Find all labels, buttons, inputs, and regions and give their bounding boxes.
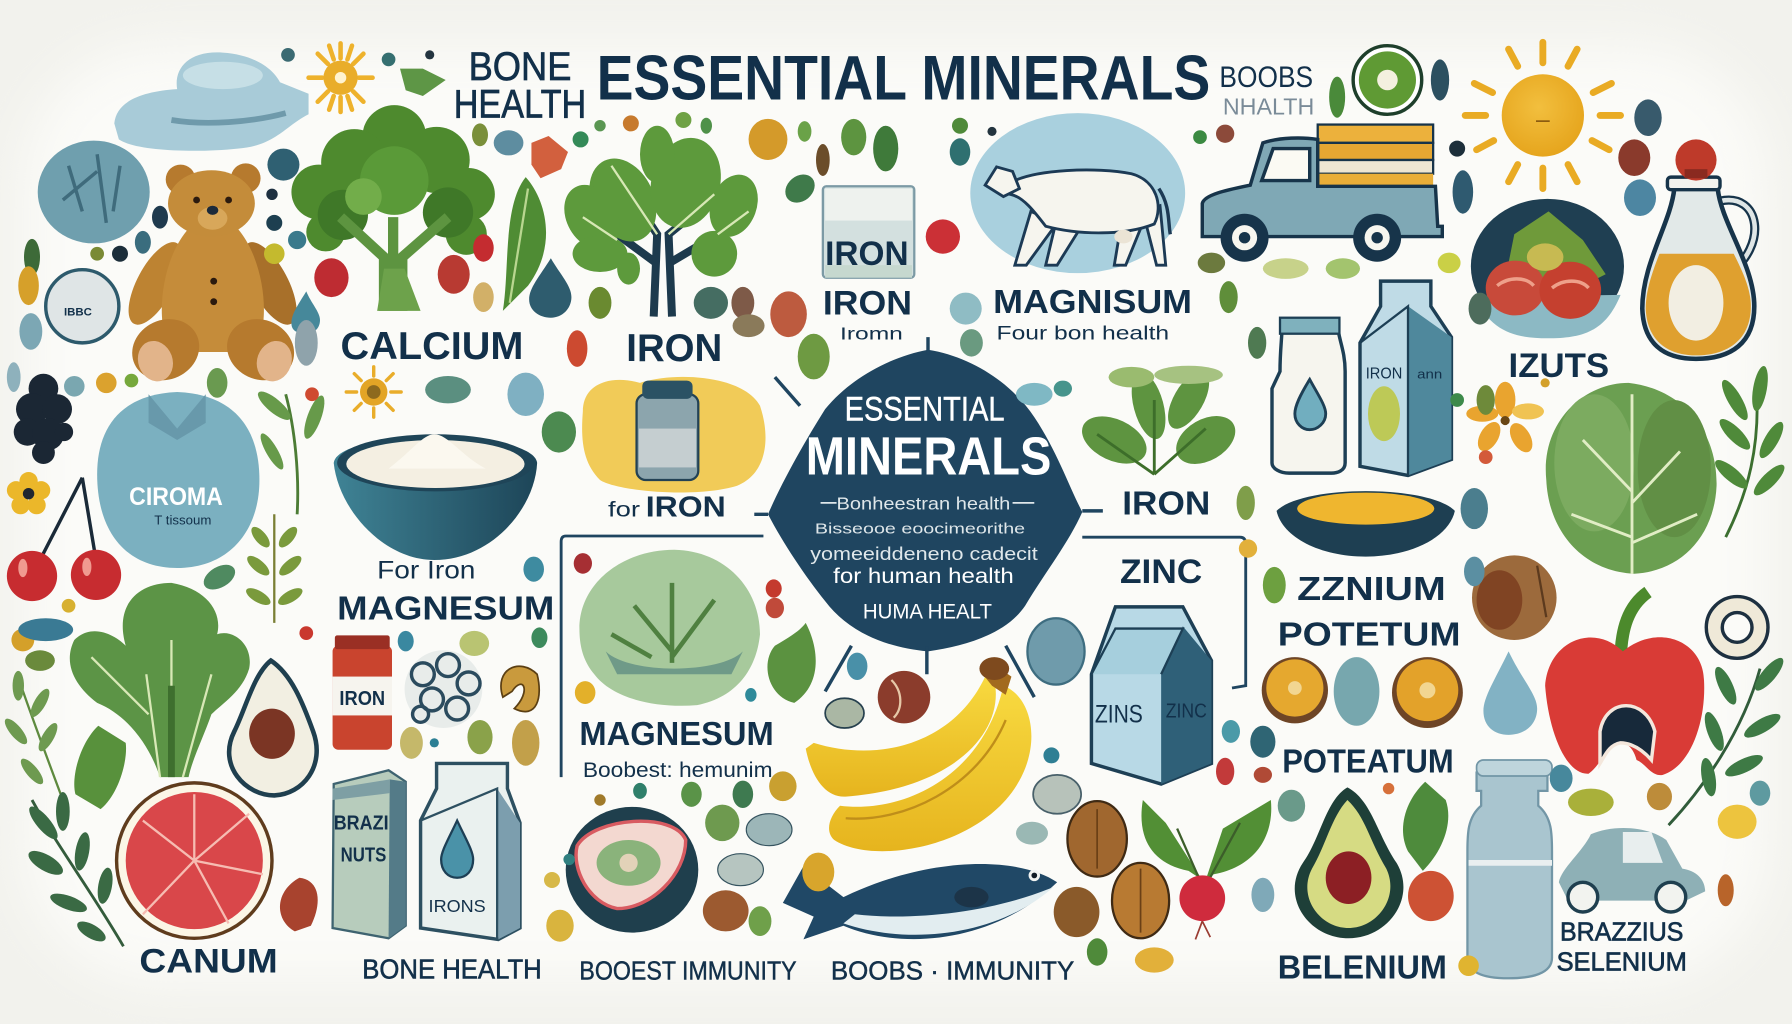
panel frame right bbox=[1082, 537, 1246, 688]
label: for iron centre bbox=[608, 492, 726, 524]
icon: long green leaf bbox=[503, 177, 546, 311]
icon: pickup truck bbox=[1202, 125, 1442, 262]
icon: iron milk carton: IRONS bbox=[429, 896, 486, 916]
label: magnesum centre: MAGNESUM bbox=[579, 716, 774, 753]
icon: radish with leaves bbox=[1141, 800, 1271, 939]
icon: shell bbox=[1033, 775, 1081, 814]
label: magnesium: MAGNISUM bbox=[993, 284, 1192, 321]
label: for iron centre: for bbox=[608, 497, 640, 522]
icon: iron carton: IRON bbox=[1366, 365, 1402, 382]
icon: gold nut bbox=[802, 853, 834, 891]
icon: bananas bbox=[806, 663, 1031, 851]
icon: red berry bbox=[926, 219, 960, 254]
icon: avocado white bbox=[229, 661, 317, 795]
icon: green oval seeds bbox=[703, 805, 792, 936]
header label: boobs health: BOOBS bbox=[1219, 61, 1313, 94]
label: calcium: CALCIUM bbox=[341, 325, 523, 368]
icon: orange flower bbox=[1466, 382, 1544, 456]
icon: water drop bbox=[1483, 651, 1537, 735]
icon: silver pill: IBBC bbox=[64, 306, 92, 318]
icon: blue mineral disc bbox=[38, 141, 150, 243]
badge body copy: for human health bbox=[833, 563, 1014, 588]
label: iron: IRON bbox=[626, 327, 722, 370]
icon: blue stone bbox=[114, 52, 309, 151]
icon: iron milk carton bbox=[421, 763, 520, 939]
icon: iron carton: ann bbox=[1417, 367, 1442, 381]
label: for iron centre: IRON bbox=[646, 492, 726, 524]
icon: cashew bbox=[501, 666, 539, 712]
label: magnesum left: MAGNESUM bbox=[337, 590, 554, 627]
icon: herb sprig centre left bbox=[254, 387, 329, 514]
icon: teddy bear bbox=[118, 163, 307, 391]
label: zinc: ZINC bbox=[1120, 553, 1202, 591]
icon: small sun top left bbox=[309, 43, 373, 112]
label: potetum: POTETUM bbox=[1278, 617, 1461, 654]
label: iron right: IRON bbox=[1122, 485, 1210, 522]
label: iron on jar: IRON bbox=[825, 235, 909, 273]
icon: zinc carton: ZINS bbox=[1095, 700, 1143, 728]
icon: broccoli bbox=[291, 105, 495, 311]
icon: silver pill bbox=[46, 270, 119, 343]
icon: teal car bbox=[1559, 828, 1705, 912]
icon: iron jar bbox=[823, 186, 914, 278]
label: belenium: BELENIUM bbox=[1278, 949, 1447, 986]
header label: bone health: BONE bbox=[469, 45, 571, 89]
panel: ciroma blue circle bbox=[97, 392, 259, 568]
label: bone health: BONE HEALTH bbox=[362, 953, 542, 984]
icon: fish bbox=[783, 864, 1057, 939]
icon: spinach tree bbox=[553, 126, 766, 317]
panel: central badge bbox=[754, 337, 1103, 697]
badge title: MINERALS bbox=[806, 426, 1051, 486]
icon: ring bbox=[1706, 597, 1768, 658]
label: boobest hemunim: Boobest: hemunim bbox=[583, 757, 773, 782]
label: brazzius selenium: BRAZZIUS bbox=[1560, 917, 1683, 947]
icon: red-brown nut bbox=[280, 878, 318, 931]
icon: large spinach leaves bbox=[1546, 383, 1717, 574]
icon: iron jar red: IRON bbox=[339, 687, 385, 710]
label: brazzius selenium bbox=[1557, 917, 1687, 976]
icon: green spade leaf bbox=[74, 726, 126, 809]
icon: iron jar red bbox=[333, 635, 392, 750]
icon: flour bowl bbox=[334, 434, 537, 560]
icon: brazil nuts box bbox=[333, 770, 406, 938]
icon: food bowl bbox=[1471, 199, 1624, 338]
icon: yellow flower bbox=[7, 472, 50, 514]
label: poteatum: POTEATUM bbox=[1282, 744, 1454, 781]
label: izuts: IZUTS bbox=[1509, 347, 1609, 385]
label: canum: CANUM bbox=[139, 943, 278, 981]
label: four bone health: Four bon health bbox=[997, 322, 1169, 344]
icon: herb sprig lower bbox=[244, 514, 305, 623]
label: zznium: ZZNIUM bbox=[1297, 571, 1446, 608]
label: boobs immunity: BOOBS · IMMUNITY bbox=[831, 955, 1074, 985]
icon: leaf beside avocado bbox=[1403, 782, 1448, 871]
icon: zinc carton: ZINC bbox=[1166, 700, 1207, 723]
panel: ciroma blue circle: CIROMA bbox=[129, 483, 223, 511]
icon: cherries bbox=[7, 478, 121, 601]
panel: ciroma blue circle: T tissoum bbox=[154, 514, 211, 528]
title: ESSENTIAL MINERALS bbox=[597, 43, 1210, 113]
icon: brazil nuts box: BRAZI bbox=[334, 812, 389, 835]
label: iron under jar: Iromn bbox=[840, 323, 903, 343]
icon: seed bbox=[825, 698, 864, 728]
badge body copy bbox=[810, 494, 1038, 623]
icon: zinc carton bbox=[1091, 607, 1211, 784]
icon: yellow food bowl bbox=[1277, 491, 1455, 557]
icon: left herb sprig bbox=[1, 671, 63, 800]
icon: green leaf centre bbox=[767, 623, 816, 703]
icon: grapefruit slice bbox=[117, 783, 272, 938]
icon: orange slices and pebble bbox=[1262, 657, 1463, 728]
icon: red pepper bbox=[1545, 592, 1704, 775]
icon: blue coin bbox=[1027, 618, 1085, 685]
icon: right branch lower bbox=[1669, 654, 1788, 825]
header label: bone health: HEALTH bbox=[454, 83, 586, 127]
panel: yellow blob with jar bbox=[582, 377, 766, 492]
header label: bone health bbox=[454, 45, 586, 127]
label: iron under jar: IRON bbox=[823, 284, 912, 322]
icon: mineral net ball bbox=[405, 650, 482, 728]
icon: left bottom branch bbox=[25, 792, 123, 946]
icon: hazelnut bbox=[878, 671, 930, 723]
panel frame left bbox=[561, 536, 763, 777]
icon: swirl food slice bbox=[566, 807, 698, 933]
icon: small sun middle bbox=[346, 367, 401, 417]
icon: brazil nuts box: NUTS bbox=[341, 844, 386, 867]
icon: kiwi slice bbox=[1353, 46, 1422, 114]
icon: green salad circle bbox=[579, 550, 760, 706]
icon: large sun bbox=[1465, 42, 1621, 189]
icon: oil jug bbox=[1642, 139, 1755, 359]
icon: cow in blue circle bbox=[970, 113, 1185, 273]
badge body copy: Bonheestran health bbox=[837, 494, 1010, 514]
icon: right branch upper bbox=[1711, 365, 1789, 537]
label: iron under jar bbox=[823, 284, 912, 343]
label: brazzius selenium: SELENIUM bbox=[1557, 946, 1687, 976]
icon: almonds bbox=[1054, 801, 1169, 938]
icon: water bottle bbox=[1467, 760, 1552, 978]
icon: black berries bbox=[14, 374, 73, 464]
icon: iron carton bbox=[1360, 281, 1451, 475]
badge body copy: Bisseooe eoocimeorithe bbox=[815, 522, 1025, 538]
label: for iron: For Iron bbox=[377, 556, 475, 584]
header label: boobs health bbox=[1219, 61, 1314, 119]
icon: large spinach left bbox=[70, 583, 250, 777]
badge heading: ESSENTIAL bbox=[845, 391, 1005, 429]
badge body copy: yomeeiddeneno cadecit bbox=[810, 543, 1038, 564]
header label: boobs health: NHALTH bbox=[1223, 93, 1314, 119]
icon: green herb sprig bbox=[1075, 365, 1244, 474]
icon: avocado right bbox=[1295, 787, 1403, 938]
icon: red nut cluster bbox=[1408, 871, 1454, 921]
icon: walnut bbox=[1472, 555, 1557, 640]
badge body copy: HUMA HEALT bbox=[863, 598, 992, 623]
icon: milk bottle bbox=[1272, 318, 1345, 473]
label: boost immunity: BOOEST IMMUNITY bbox=[579, 955, 797, 985]
